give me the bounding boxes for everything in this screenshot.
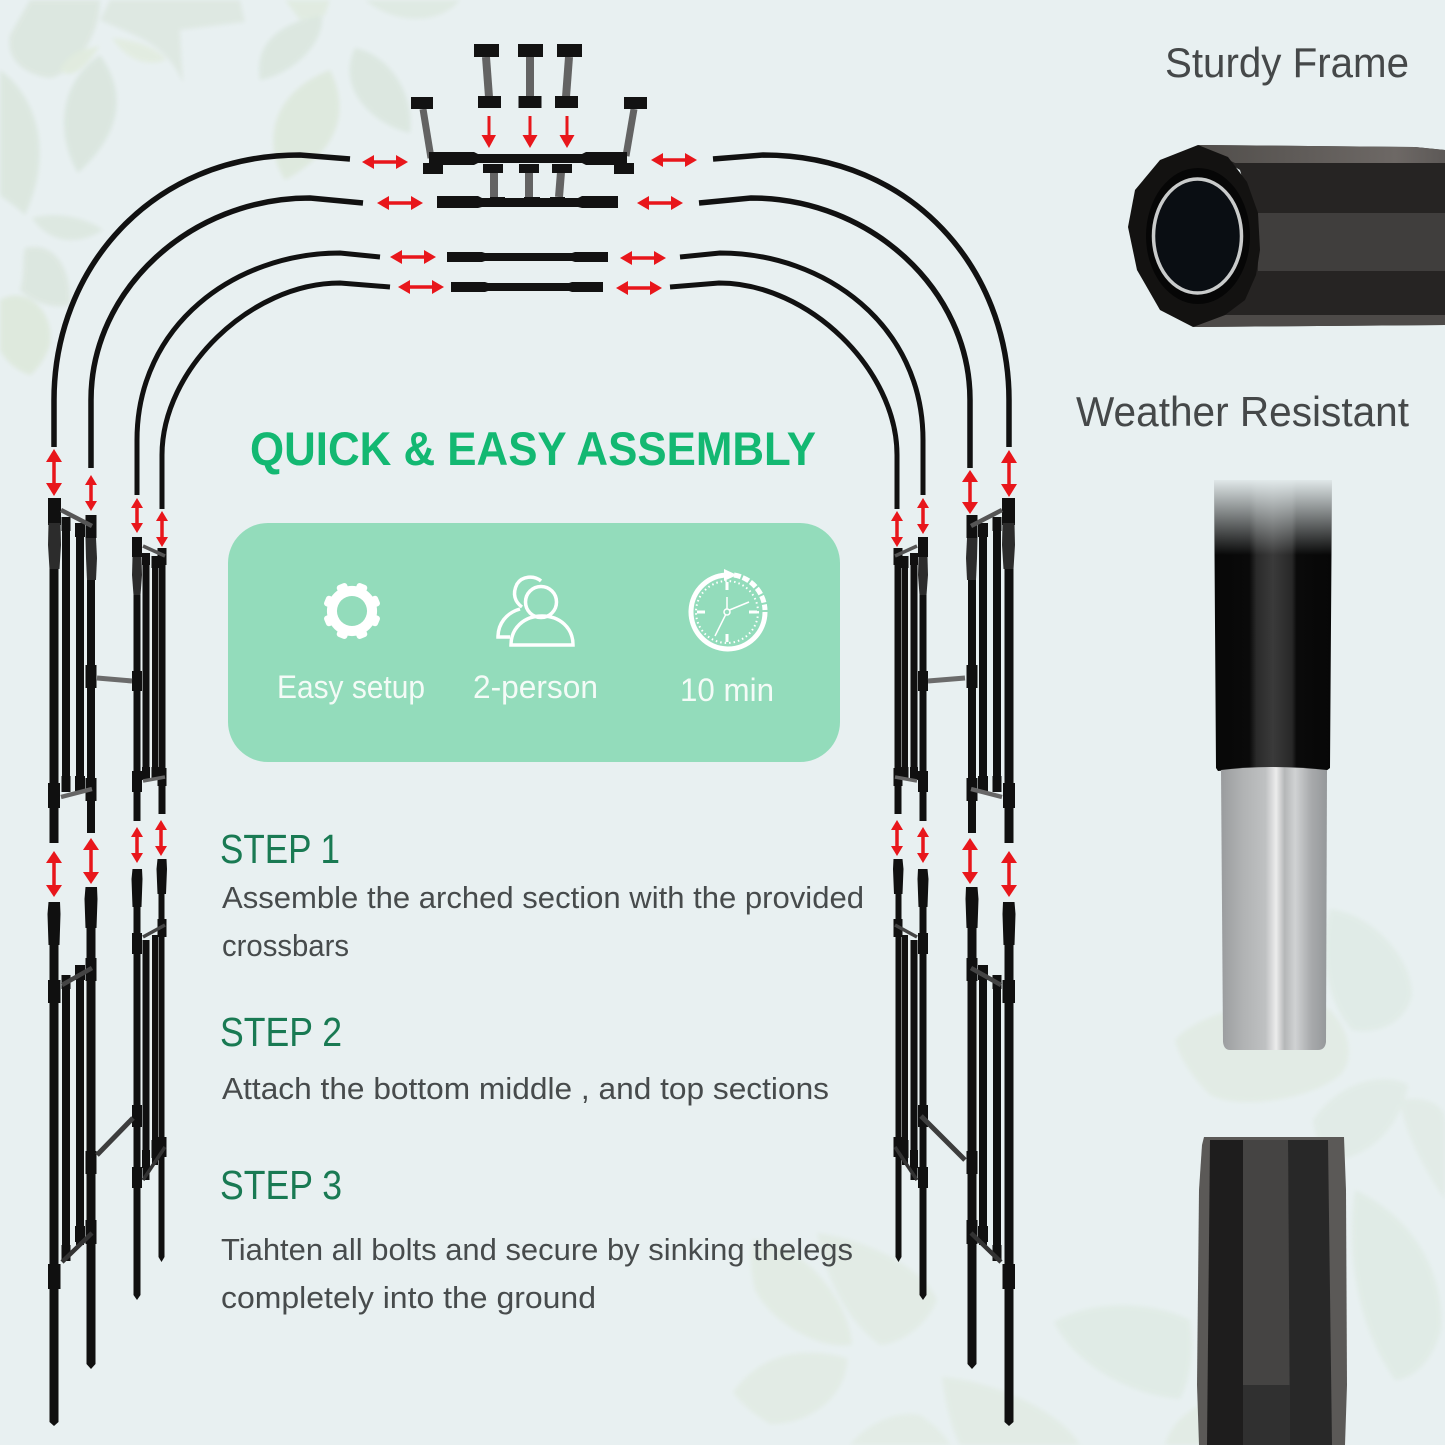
left arch 1 <box>54 155 350 447</box>
title: QUICK & EASY ASSEMBLY <box>250 422 816 475</box>
red double arrows: vertical <box>54 456 1009 890</box>
left legs <box>48 498 167 1426</box>
label: 10 min: 10 min <box>680 672 774 708</box>
step 1 text: crossbars <box>222 928 349 963</box>
red double arrow heads: vertical <box>46 449 1017 897</box>
left arch 4 <box>162 283 390 509</box>
heading: sturdy frame: Sturdy Frame <box>1165 39 1409 86</box>
tube joint: weather resistant <box>1197 470 1347 1445</box>
icon: clock <box>691 569 765 649</box>
left arch 3 <box>137 253 380 495</box>
step 2 text: Attach the bottom middle , and top sections <box>222 1071 829 1106</box>
right arch 1 <box>713 155 1009 447</box>
arched top tubes <box>54 155 1009 509</box>
background leaves: bottom right <box>733 909 1445 1445</box>
icon: two people <box>498 577 573 645</box>
red double arrows: horizontal <box>370 160 689 288</box>
tube end: sturdy frame <box>1128 145 1445 327</box>
lower black sleeve <box>1197 1137 1347 1445</box>
left arch 2 <box>91 198 363 468</box>
step 2 heading: STEP 2 <box>220 1009 342 1055</box>
grey stems <box>423 57 634 197</box>
step 1 text <box>222 880 864 963</box>
black brackets <box>411 44 647 174</box>
step 3 text: Tiahten all bolts and secure by sinking thelegs <box>221 1232 853 1267</box>
right arch 4 <box>670 283 897 509</box>
step 1 heading: STEP 1 <box>220 826 340 872</box>
step 3 text: completely into the ground <box>221 1280 596 1315</box>
icon: gear <box>314 573 390 649</box>
crossbar connectors top assembly <box>411 44 647 292</box>
silver inner tube <box>1221 767 1327 1050</box>
red double arrow heads: horizontal <box>362 153 697 295</box>
right arch 2 <box>699 198 970 468</box>
background leaves: top left <box>0 0 460 375</box>
label: easy setup: Easy setup <box>277 669 425 705</box>
right arch 3 <box>680 253 923 495</box>
red arrows: downward, top assembly <box>482 116 574 148</box>
heading: weather resistant: Weather Resistant <box>1076 388 1409 435</box>
four crossbars <box>429 152 627 292</box>
panel: assembly facts <box>228 523 840 762</box>
label: 2-person: 2-person <box>473 669 598 705</box>
step 3 heading: STEP 3 <box>220 1162 342 1208</box>
upper black sleeve <box>1214 480 1332 771</box>
right legs <box>893 498 1016 1426</box>
step 3 text <box>221 1232 853 1315</box>
step 1 text: Assemble the arched section with the provided <box>222 880 864 915</box>
